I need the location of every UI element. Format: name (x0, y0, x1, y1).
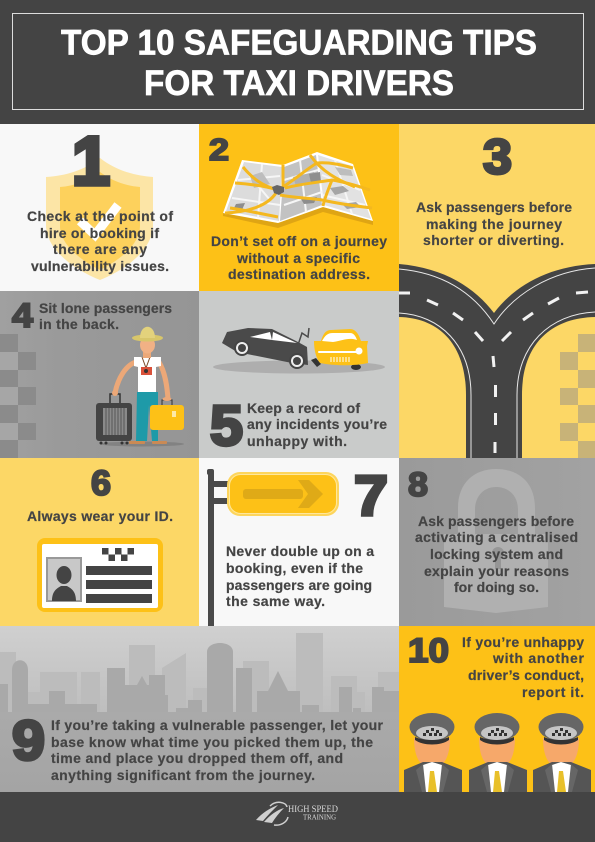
tip 6 text: Always wear your ID. (27, 508, 173, 524)
panel 10: report conduct (399, 626, 595, 792)
icon: folded map (223, 152, 373, 228)
tip 9 text: anything significant from the journey. (51, 767, 315, 783)
tip 7 text: the same way. (226, 593, 325, 609)
logo: High Speed Training (256, 802, 338, 825)
tip 1 text: hire or booking if (40, 225, 159, 241)
tip 4 text (39, 300, 172, 332)
title: FOR TAXI DRIVERS (144, 64, 454, 103)
tip 1 text: there are any (53, 241, 147, 257)
tip 7 text (226, 543, 374, 609)
number 1: 1 (72, 122, 110, 200)
panel 9: tell your base (0, 626, 399, 792)
tip 8 text: locking system and (430, 546, 563, 562)
header banner (0, 0, 595, 124)
panel 8: central locking (399, 458, 595, 626)
tip 4 text: Sit lone passengers (39, 300, 172, 316)
tip 2 text: destination address. (228, 266, 370, 282)
tip 8 text (415, 513, 578, 595)
tip 8 text: Ask passengers before (418, 513, 574, 529)
tip 8 text: explain your reasons (424, 563, 569, 579)
illustration: forked road (399, 264, 595, 458)
tip 5 text: unhappy with. (247, 433, 347, 449)
number 10: 10 (408, 632, 449, 670)
panel 3: ask before diverting (399, 124, 595, 459)
panel 7: never double up (199, 458, 399, 626)
panel 1: check vulnerability (0, 122, 199, 291)
tip 3 text: making the journey (426, 216, 562, 232)
tip 10 text: with another (492, 650, 585, 666)
logo: High Speed Training: TRAINING (303, 814, 336, 822)
illustration: taxi driver 1 (404, 713, 462, 792)
number 4: 4 (12, 297, 33, 335)
tip 7 text: booking, even if the (226, 560, 363, 576)
icon: arrow road sign (207, 469, 339, 626)
checker pattern (0, 334, 36, 458)
tip 8 text: for doing so. (454, 579, 539, 595)
panel 4: sit lone passengers in back (0, 291, 199, 458)
illustration: traveller with luggage (96, 327, 184, 446)
tip 1 text: vulnerability issues. (31, 258, 169, 274)
tip 2 text: Don’t set off on a journey (211, 233, 387, 249)
tip 4 text: in the back. (39, 316, 119, 332)
tip 1 text: Check at the point of (27, 208, 173, 224)
number 9: 9 (12, 708, 45, 772)
tip 9 text (51, 717, 384, 783)
number 6: 6 (91, 464, 111, 503)
tip 3 text (416, 199, 572, 248)
tip 5 text: any incidents you’re (247, 416, 387, 432)
illustration: city skyline (0, 633, 399, 792)
logo: High Speed Training: HIGH SPEED (288, 804, 338, 814)
title: TOP 10 SAFEGUARDING TIPS (61, 24, 537, 62)
tip 10 text: If you’re unhappy (462, 634, 584, 650)
tip 3 text: shorter or diverting. (423, 232, 564, 248)
icon: shield with tick (46, 158, 153, 280)
tip 5 text: Keep a record of (247, 400, 360, 416)
tip 3 text: Ask passengers before (416, 199, 572, 215)
illustration: taxi driver 3 (533, 713, 591, 792)
icon: padlock (444, 469, 548, 613)
illustration: car crash (213, 328, 385, 374)
tip 2 text: without a specific (236, 250, 360, 266)
tip 9 text: time and place you dropped them off, and (51, 750, 343, 766)
tip 10 text (462, 634, 585, 700)
tip 8 text: activating a centralised (415, 529, 578, 545)
suitcase (96, 394, 132, 444)
panel 6: wear your ID (0, 458, 199, 626)
icon: ID card (37, 538, 163, 612)
tip 10 text: report it. (522, 684, 584, 700)
tip 7 text: Never double up on a (226, 543, 374, 559)
illustration: taxi driver 2 (469, 713, 527, 792)
tip 1 text (27, 208, 173, 274)
tip 10 text: driver’s conduct, (468, 667, 584, 683)
yellow case (150, 400, 184, 430)
panel 2: destination address (199, 124, 399, 291)
number 3: 3 (483, 130, 512, 184)
tip 7 text: passengers are going (226, 577, 372, 593)
tip 5 text (247, 400, 387, 449)
footer bar (0, 792, 595, 842)
tip 9 text: If you’re taking a vulnerable passenger, let your (51, 717, 384, 733)
number 2: 2 (209, 132, 229, 167)
title (61, 24, 537, 103)
panel 5: keep a record of incidents (199, 291, 399, 458)
tip 9 text: base know what time you picked them up, the (51, 734, 373, 750)
number 5: 5 (210, 394, 243, 458)
checker pattern (560, 334, 595, 459)
tip 2 text (211, 233, 387, 282)
number 8: 8 (408, 466, 428, 504)
number 7: 7 (354, 464, 388, 528)
